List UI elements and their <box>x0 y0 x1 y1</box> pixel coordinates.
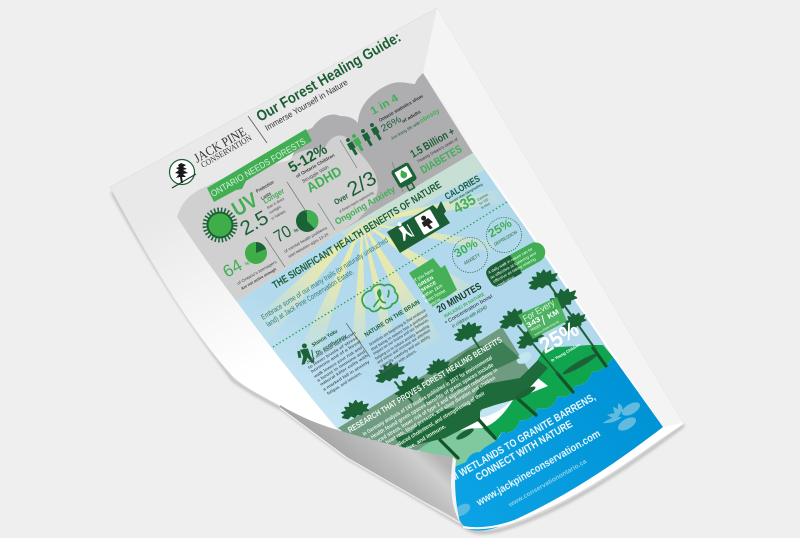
text: nature on the brain: NATURE ON THE BRAIN <box>363 299 422 339</box>
stat: 20 minutes <box>435 281 494 330</box>
circle: 30% anxiety <box>452 236 488 272</box>
callout: green space: If you have <box>413 267 435 284</box>
callout: for every km: / <box>538 313 549 328</box>
dark reflections <box>395 360 548 448</box>
dark streak upper <box>418 340 520 404</box>
callout: for every km: For Every <box>521 297 557 324</box>
page curl <box>280 405 460 523</box>
title: Our Forest Healing Guide: <box>254 29 404 125</box>
land: light bank <box>418 428 496 468</box>
icon: dr photo <box>414 209 440 235</box>
stat: calories: Burned when hiking/walking <box>448 182 483 205</box>
stat: 64% with pie: % <box>244 260 251 268</box>
logo <box>170 124 253 188</box>
icon: sun <box>205 210 235 240</box>
callout: pill <box>483 239 549 288</box>
stat: 70% with pie: % <box>293 227 300 235</box>
stat: ongoing anxiety: Ongoing Anxiety <box>333 184 397 227</box>
art: light grey cloud <box>177 135 378 302</box>
banner: ontario needs forests: ONTARIO NEEDS FORESTS <box>209 136 308 199</box>
website secondary: www.conservationontario.ca <box>507 458 588 509</box>
stat: 70% with pie <box>270 210 330 259</box>
stat: obesity: of adults <box>401 109 422 124</box>
stat: ADHD: Struggle With <box>301 164 330 184</box>
stat: ADHD <box>286 141 344 196</box>
text: research body: and a reduced cholesterol, and strengthening of their <box>382 390 487 457</box>
stat: 20 minutes: in children with ADHD <box>451 304 489 330</box>
stat: obesity <box>368 92 441 141</box>
callout: green space: within 1km <box>421 283 444 300</box>
callout: green space: GREEN <box>417 275 435 289</box>
text: nature on the brain: that being in nature has a profound <box>370 312 429 352</box>
text: nature on the brain: helping us to reduce anxiety, brooding <box>374 323 430 361</box>
text: shinrin yoku: Dr. ecotherapy <box>315 333 349 357</box>
lower land tree trunks <box>440 348 606 458</box>
heading: significant health benefits: THE SIGNIFICANT HEALTH BENEFITS OF NATURE <box>270 179 444 292</box>
dark land lumps <box>455 351 599 442</box>
icon: water lily <box>603 400 642 433</box>
callout: for every km: 343 <box>526 316 542 330</box>
stat: 70% with pie: start between ages 13-24 <box>287 231 330 259</box>
callout: green space: SPACE <box>420 280 438 294</box>
sun rays <box>252 189 505 350</box>
callout: pill: as effective at lowering and <box>490 251 537 280</box>
land: green banks <box>482 345 613 441</box>
stat: ongoing anxiety: Over <box>332 191 350 207</box>
stat: UV: sunlight <box>268 204 283 215</box>
stat: 64% with pie: Are not active enough <box>240 266 278 291</box>
stat dividers <box>265 140 403 267</box>
stat: obesity: Ontario statistics show <box>378 93 424 123</box>
callout: for every km: TREES <box>530 323 542 333</box>
text: research body: reduced stress, lower risk of type 2 and significant reductions in <box>369 367 499 449</box>
stat: diabetes: 1.5 Billion + <box>408 126 457 161</box>
header divider <box>248 116 267 143</box>
paper right panel <box>423 8 683 427</box>
stat: UV: Protection <box>255 180 275 195</box>
stat: calories <box>443 174 492 217</box>
stat: diabetes <box>408 126 464 177</box>
stat: 20 minutes: WALKING IN NATURE <box>443 292 485 319</box>
intro text: Embrace some of our many trails (or naturally untouched <box>259 236 390 322</box>
subtitle: Immerse Yourself in Nature <box>263 77 350 133</box>
text: nature on the brain: to connect with others. <box>381 348 417 374</box>
divider: green dotted line <box>273 202 507 347</box>
upper tree trunks <box>395 284 596 402</box>
paper bottom edge highlight <box>463 423 683 528</box>
heading: research: RESEARCH THAT PROVES FOREST HEALING BENEFITS <box>346 334 504 435</box>
water <box>445 357 663 531</box>
bottom heading: FROM WETLANDS TO GRANITE BARRENS, <box>432 391 598 494</box>
text: shinrin yoku: walk lowers your risk and <box>312 345 363 379</box>
stat: UV <box>228 180 286 240</box>
callout: green space <box>409 258 457 308</box>
stat: diabetes: Treating Ontario's cases of <box>416 136 459 164</box>
text: research body: In Germany analysis of 143 studies published in 2017 for environmental <box>362 355 494 438</box>
stat: UV: than in direct <box>266 196 286 210</box>
stat: calories: CALORIES <box>443 174 482 203</box>
text: shinrin yoku: to lower levels of stress <box>307 334 359 370</box>
paper sheet <box>110 8 683 530</box>
sky <box>237 153 613 430</box>
hiker panel <box>387 201 450 253</box>
text: shinrin yoku: hormone and of a forest <box>310 338 362 374</box>
stat: UV: Lasts <box>260 191 273 202</box>
sky top glow <box>340 153 484 244</box>
icon: people <box>344 122 383 156</box>
pools <box>476 350 533 421</box>
circle: 30% anxiety: 30% <box>452 236 480 261</box>
callout: for every km <box>518 297 567 339</box>
stat: ADHD: 5-12% <box>286 141 330 176</box>
stat: ongoing anxiety: of Ontario reports experiencing <box>338 191 374 214</box>
text: shinrin yoku: natural killer cells with <box>319 353 369 387</box>
callout: pill: effective as taking relaxing <box>493 257 536 284</box>
tree crowns <box>339 266 588 421</box>
intro text: land) at Jack Pine Conservation Estate. <box>264 267 356 329</box>
stat: calories: lb hiker <box>480 201 492 210</box>
stat: 64% with pie: of Ontario's teenagers <box>236 259 277 286</box>
paper shadow <box>112 192 684 532</box>
stat: 64% with pie: 64 <box>220 256 245 281</box>
stat: 64% with pie <box>220 242 278 291</box>
stat: ADHD: of Ontario Children <box>295 152 336 179</box>
text: research body: in Health found green spaces benefits of green spaces include <box>365 362 495 444</box>
website: www.jackpineconservation.com <box>474 428 603 509</box>
art: dark grey cloud <box>290 73 473 232</box>
circle: 25% depression: DEPRESSION <box>493 230 518 247</box>
stat: obesity: obesity <box>418 107 441 125</box>
text: nature on the brain <box>363 299 431 374</box>
callout: for every km: KM <box>546 309 561 321</box>
callout: green space: from home <box>424 288 447 305</box>
text: shinrin yoku <box>305 329 371 396</box>
stat: 20 minutes: 20 MINUTES <box>435 281 484 316</box>
icon: hiker <box>394 219 415 242</box>
stat: 70% with pie: 70 <box>270 222 295 246</box>
circle: 30% anxiety: ANXIETY <box>463 252 482 267</box>
text: shinrin yoku: a boost in immune and <box>316 349 366 383</box>
icon: glucose meter <box>390 162 421 194</box>
text: research body: cognitive, and immune. <box>393 423 448 460</box>
forest band <box>338 327 530 458</box>
circle: 25% depression: 25% <box>486 216 514 241</box>
stat: calories: for 100 <box>478 197 489 206</box>
stat: 25% young children: In Young Children <box>550 342 582 363</box>
stat: obesity: 26% <box>379 114 404 135</box>
stat: calories: 435 <box>450 191 479 217</box>
text: shinrin yoku: a marked fall in anxiety <box>322 359 371 392</box>
stat: 20 minutes: • Concentration boost <box>444 293 494 326</box>
icon: small water lily <box>452 501 472 519</box>
icon: brain <box>359 280 400 316</box>
text: shinrin yoku: Shinrin Yoku <box>311 329 339 349</box>
text: shinrin yoku: fatigue, and tension. <box>326 370 362 396</box>
callout: for every km: Asthma Rates Drop By <box>534 319 560 337</box>
logo wordmark: CONSERVATION <box>199 133 253 170</box>
circle: 25% depression <box>486 216 522 252</box>
stat: UV: UV <box>228 188 262 221</box>
stat: UV: or habitats <box>270 209 286 221</box>
stat: UV: Longer <box>262 186 286 206</box>
icon: walker <box>296 342 314 365</box>
text: research body: levels, heart rate, blood pressure, and sleep duration and children <box>372 375 497 454</box>
text: nature on the brain: Scientists are beginning to find evidence <box>368 307 427 347</box>
text: nature on the brain: and stress and increase our attention <box>376 328 431 365</box>
text: nature on the brain: impact on our brains and our behavior, <box>372 317 430 356</box>
callout: pill: medication. <box>497 275 516 288</box>
bottom heading: CONNECT WITH NATURE <box>474 418 575 484</box>
stat: UV: 2.5 <box>236 207 273 240</box>
stat: 70% with pie: of mental health problems <box>283 225 328 254</box>
stat: calories: Calories <box>476 192 489 202</box>
stat: obesity: 1 in 4 <box>368 92 401 118</box>
stat: diabetes: DIABETES <box>418 143 464 177</box>
callout: green space: you've... <box>429 295 445 308</box>
stat: ongoing anxiety: 2/3 <box>344 167 380 201</box>
text: shinrin yoku: Just one hour has shown <box>305 330 357 365</box>
divider <box>346 323 370 357</box>
logo wordmark: JACK PINE <box>191 124 249 166</box>
stat: ADHD: ADHD <box>304 163 344 196</box>
stat: obesity: Are living life with <box>390 120 422 141</box>
text: nature on the brain: capacity, creativity and our ability <box>379 334 431 369</box>
stat: 25% young children: 25% <box>535 316 583 358</box>
callout: pill: A daily walk in nature can be <box>488 247 533 275</box>
